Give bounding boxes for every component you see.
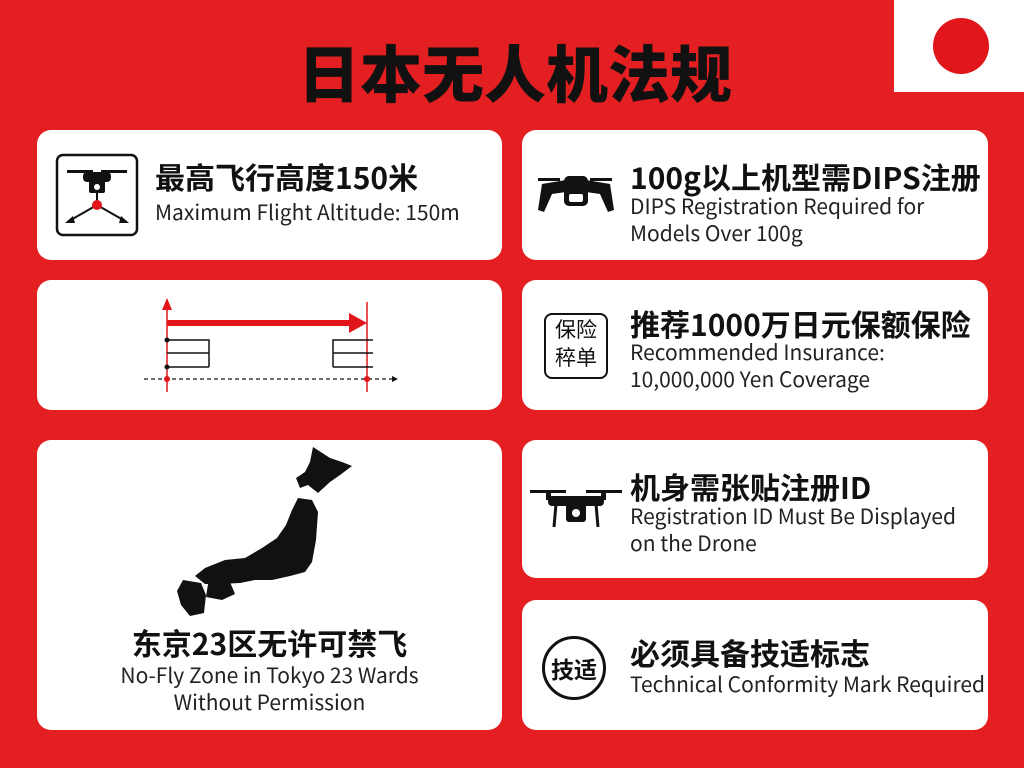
subtext xyxy=(120,660,419,717)
subtext: Models Over 100g xyxy=(630,218,803,248)
icon: 技适 mark xyxy=(542,636,606,700)
subtext: Registration ID Must Be Displayed xyxy=(630,501,956,531)
subtext: Technical Conformity Mark Required xyxy=(630,669,985,699)
heading: 100g以上机型需DIPS注册 xyxy=(630,154,981,198)
icon: japan map xyxy=(177,447,352,616)
panel: registration ID xyxy=(522,440,988,578)
icon: insurance badge: 保险 xyxy=(555,314,597,344)
title: 日本无人机法规 xyxy=(298,25,732,115)
subtext: 10,000,000 Yen Coverage xyxy=(630,364,870,394)
panel: altitude xyxy=(37,130,502,260)
subtext: on the Drone xyxy=(630,528,757,558)
subtext: DIPS Registration Required for xyxy=(630,191,924,221)
chart: distance diagram xyxy=(144,298,398,392)
subtext xyxy=(630,337,885,394)
subtext xyxy=(630,501,956,558)
icon: 技适 mark: 技适 xyxy=(551,651,597,685)
panel: DIPS xyxy=(522,130,988,260)
subtext: Recommended Insurance: xyxy=(630,337,885,367)
heading: 必须具备技适标志 xyxy=(630,630,870,674)
icon: drone altitude xyxy=(56,154,138,236)
icon: drone with camera xyxy=(530,490,622,528)
icon: drone xyxy=(538,176,614,212)
panel: conformity mark xyxy=(522,600,988,730)
flag xyxy=(894,0,1024,92)
subtext: No-Fly Zone in Tokyo 23 Wards xyxy=(120,660,419,690)
icon: insurance badge: 稡单 xyxy=(555,342,597,372)
panel: distance diagram xyxy=(37,280,502,410)
panel: tokyo no-fly map xyxy=(37,440,502,730)
heading: 最高飞行高度150米 xyxy=(155,154,418,198)
subtext: Maximum Flight Altitude: 150m xyxy=(155,197,460,227)
subtext xyxy=(630,191,924,248)
subtext: Without Permission xyxy=(174,687,365,717)
heading: 推荐1000万日元保额保险 xyxy=(630,301,971,345)
heading: 东京23区无许可禁飞 xyxy=(132,620,407,664)
icon: insurance badge xyxy=(544,313,608,379)
panel: insurance xyxy=(522,280,988,410)
heading: 机身需张贴注册ID xyxy=(630,464,871,508)
